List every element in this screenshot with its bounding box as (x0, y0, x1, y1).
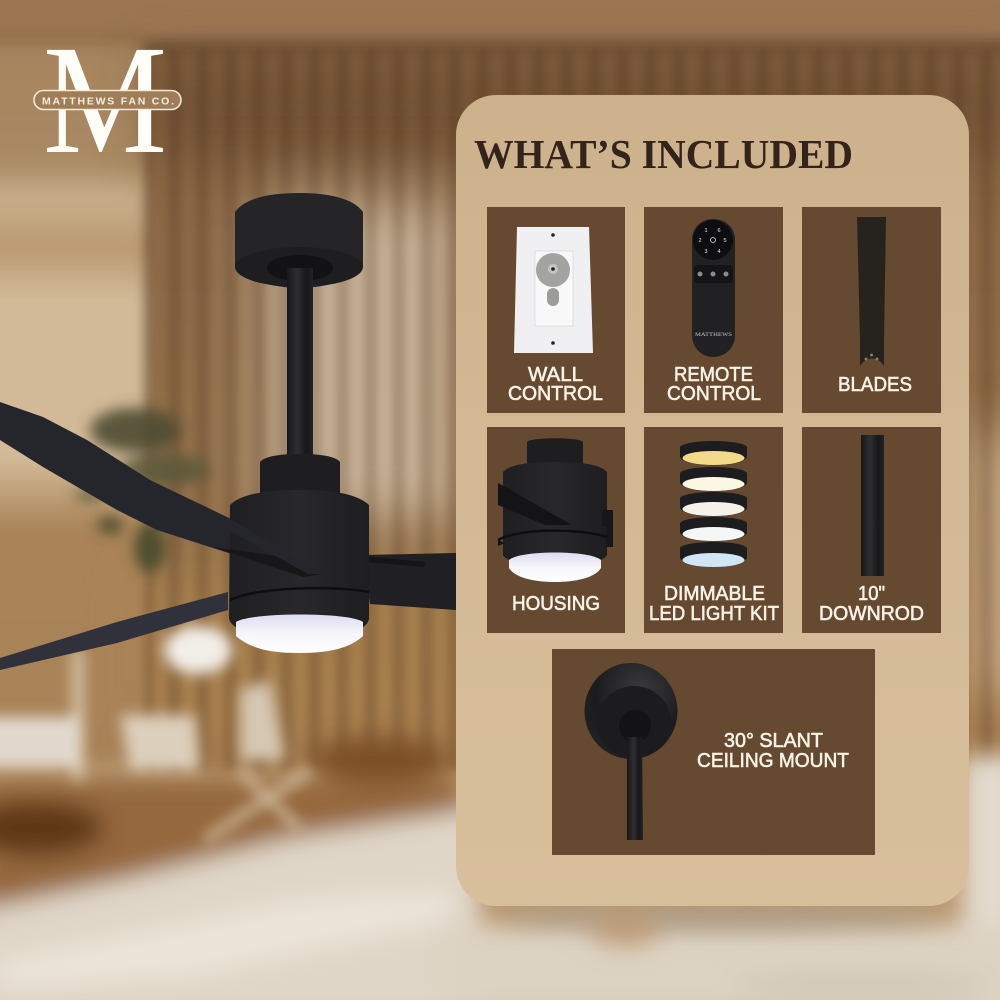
label: downrod (819, 583, 924, 625)
tile: LED kit (644, 427, 783, 633)
icon: remote: MATTHEWS (695, 332, 732, 338)
LED light (236, 614, 363, 653)
icon: wall control (514, 227, 593, 353)
label: housing: HOUSING (512, 593, 600, 615)
icon: remote (692, 219, 735, 357)
label: wall control (508, 364, 603, 405)
icon: color temperature discs (680, 441, 747, 567)
label: LED kit: LED LIGHT KIT (649, 603, 779, 625)
downrod (287, 268, 313, 458)
label: remote control: CONTROL (667, 383, 761, 405)
label: ceiling mount: 30° SLANT (724, 730, 823, 752)
tile: downrod (802, 427, 941, 633)
icon: remote: 2 (698, 238, 702, 244)
label: wall control: CONTROL (508, 383, 603, 405)
icon: remote: 6 (717, 228, 721, 234)
label: downrod: DOWNROD (819, 603, 924, 625)
label: downrod: 10" (858, 583, 885, 605)
icon: slant mount (584, 663, 678, 840)
tile: remote control (644, 207, 783, 413)
icon: housing (498, 438, 613, 582)
panel: what's included (456, 95, 969, 906)
tile: ceiling mount (552, 649, 875, 855)
title: WHAT’S INCLUDED (474, 131, 853, 177)
tile: wall control (487, 207, 625, 413)
icon: remote: 5 (723, 238, 727, 244)
blurred plant (74, 408, 210, 572)
fan blades (0, 402, 456, 670)
logo: M (43, 13, 167, 186)
motor housing (213, 454, 369, 640)
icon: remote: 4 (717, 249, 721, 255)
ceiling fan (0, 193, 456, 670)
icon: remote: 3 (704, 249, 708, 255)
logo: MATTHEWS FAN CO. (42, 96, 174, 108)
label: blades: BLADES (838, 374, 912, 396)
label: wall control: WALL (528, 364, 583, 386)
icon: blade (857, 217, 886, 366)
icon: remote: 1 (704, 228, 708, 234)
label: ceiling mount (697, 730, 849, 772)
blurred lower room (0, 738, 1000, 1000)
icon: downrod (861, 435, 884, 576)
tile: blades (802, 207, 941, 413)
label: ceiling mount: CEILING MOUNT (697, 750, 849, 772)
label: LED kit (649, 583, 779, 625)
canopy (235, 193, 363, 288)
label: LED kit: DIMMABLE (664, 583, 765, 605)
label: remote control (667, 364, 761, 405)
tile: housing (487, 427, 625, 633)
label: remote control: REMOTE (674, 364, 753, 386)
